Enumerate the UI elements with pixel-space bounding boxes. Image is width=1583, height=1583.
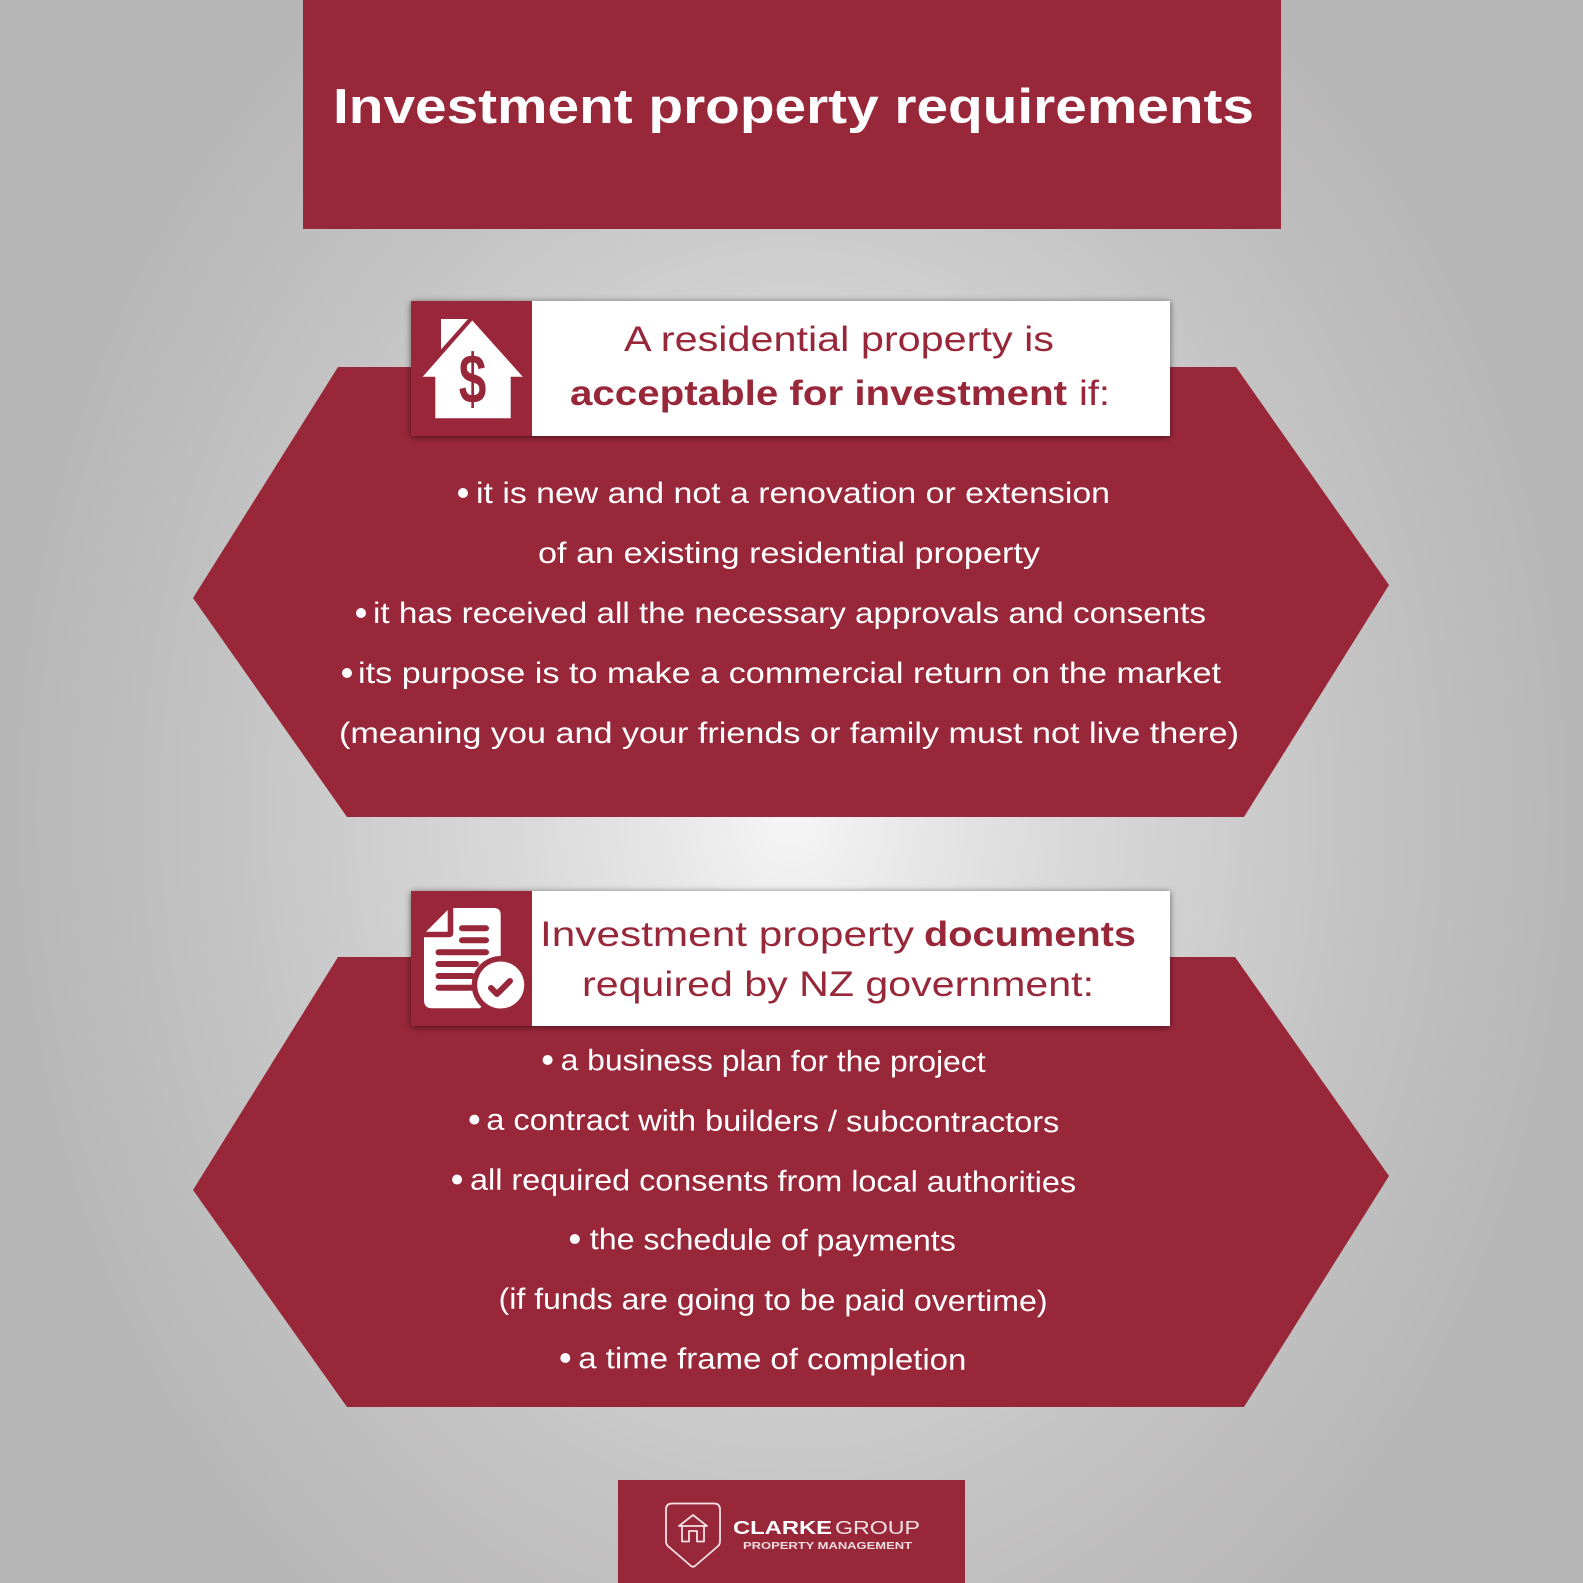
logo wordmark: GROUP	[835, 1518, 920, 1538]
bullet list	[339, 477, 1239, 750]
logo wordmark: CLARKE	[733, 1518, 832, 1538]
bullet list: it has received all the necessary approvals and consents	[373, 597, 1206, 630]
bullet list: its purpose is to make a commercial return on the market	[358, 657, 1221, 690]
header card	[411, 301, 1170, 436]
icon: house with dollar sign: $	[459, 340, 486, 418]
hexagon background	[193, 367, 1389, 817]
header text: documents	[924, 915, 1136, 954]
bullet list: of an existing residential property	[538, 537, 1040, 570]
bullet list: (if funds are going to be paid overtime)	[498, 1283, 1048, 1318]
icon: shield with house	[666, 1504, 720, 1567]
bullet list	[451, 1044, 1077, 1377]
hexagon background	[193, 957, 1389, 1407]
bullet list: all required consents from local authorities	[470, 1164, 1076, 1199]
title: Investment property requirements	[333, 80, 1254, 134]
icon: document with check mark	[424, 908, 530, 1014]
bullet list: a contract with builders / subcontractors	[486, 1104, 1059, 1139]
bullet list: it is new and not a renovation or extension	[476, 477, 1110, 510]
header text: Investment property	[540, 915, 915, 954]
panel: acceptable property	[193, 301, 1389, 817]
bullet list: a time frame of completion	[578, 1342, 966, 1377]
panel: documents	[193, 891, 1389, 1407]
logo wordmark	[733, 1518, 920, 1552]
logo wordmark: PROPERTY MANAGEMENT	[743, 1540, 913, 1552]
footer logo block	[618, 1480, 965, 1583]
header text	[570, 320, 1110, 413]
header text: acceptable for investment	[570, 374, 1067, 413]
header text: if:	[1079, 374, 1110, 413]
header text: A residential property is	[624, 320, 1054, 359]
bullet list: (meaning you and your friends or family must not live there)	[339, 717, 1239, 750]
bullet list: the schedule of payments	[590, 1223, 956, 1258]
bullet list: a business plan for the project	[561, 1044, 986, 1079]
header text	[540, 915, 1136, 1004]
title banner	[303, 0, 1281, 229]
header text: required by NZ government:	[582, 965, 1094, 1004]
icon: house with dollar sign	[423, 319, 523, 418]
header card	[411, 891, 1170, 1026]
